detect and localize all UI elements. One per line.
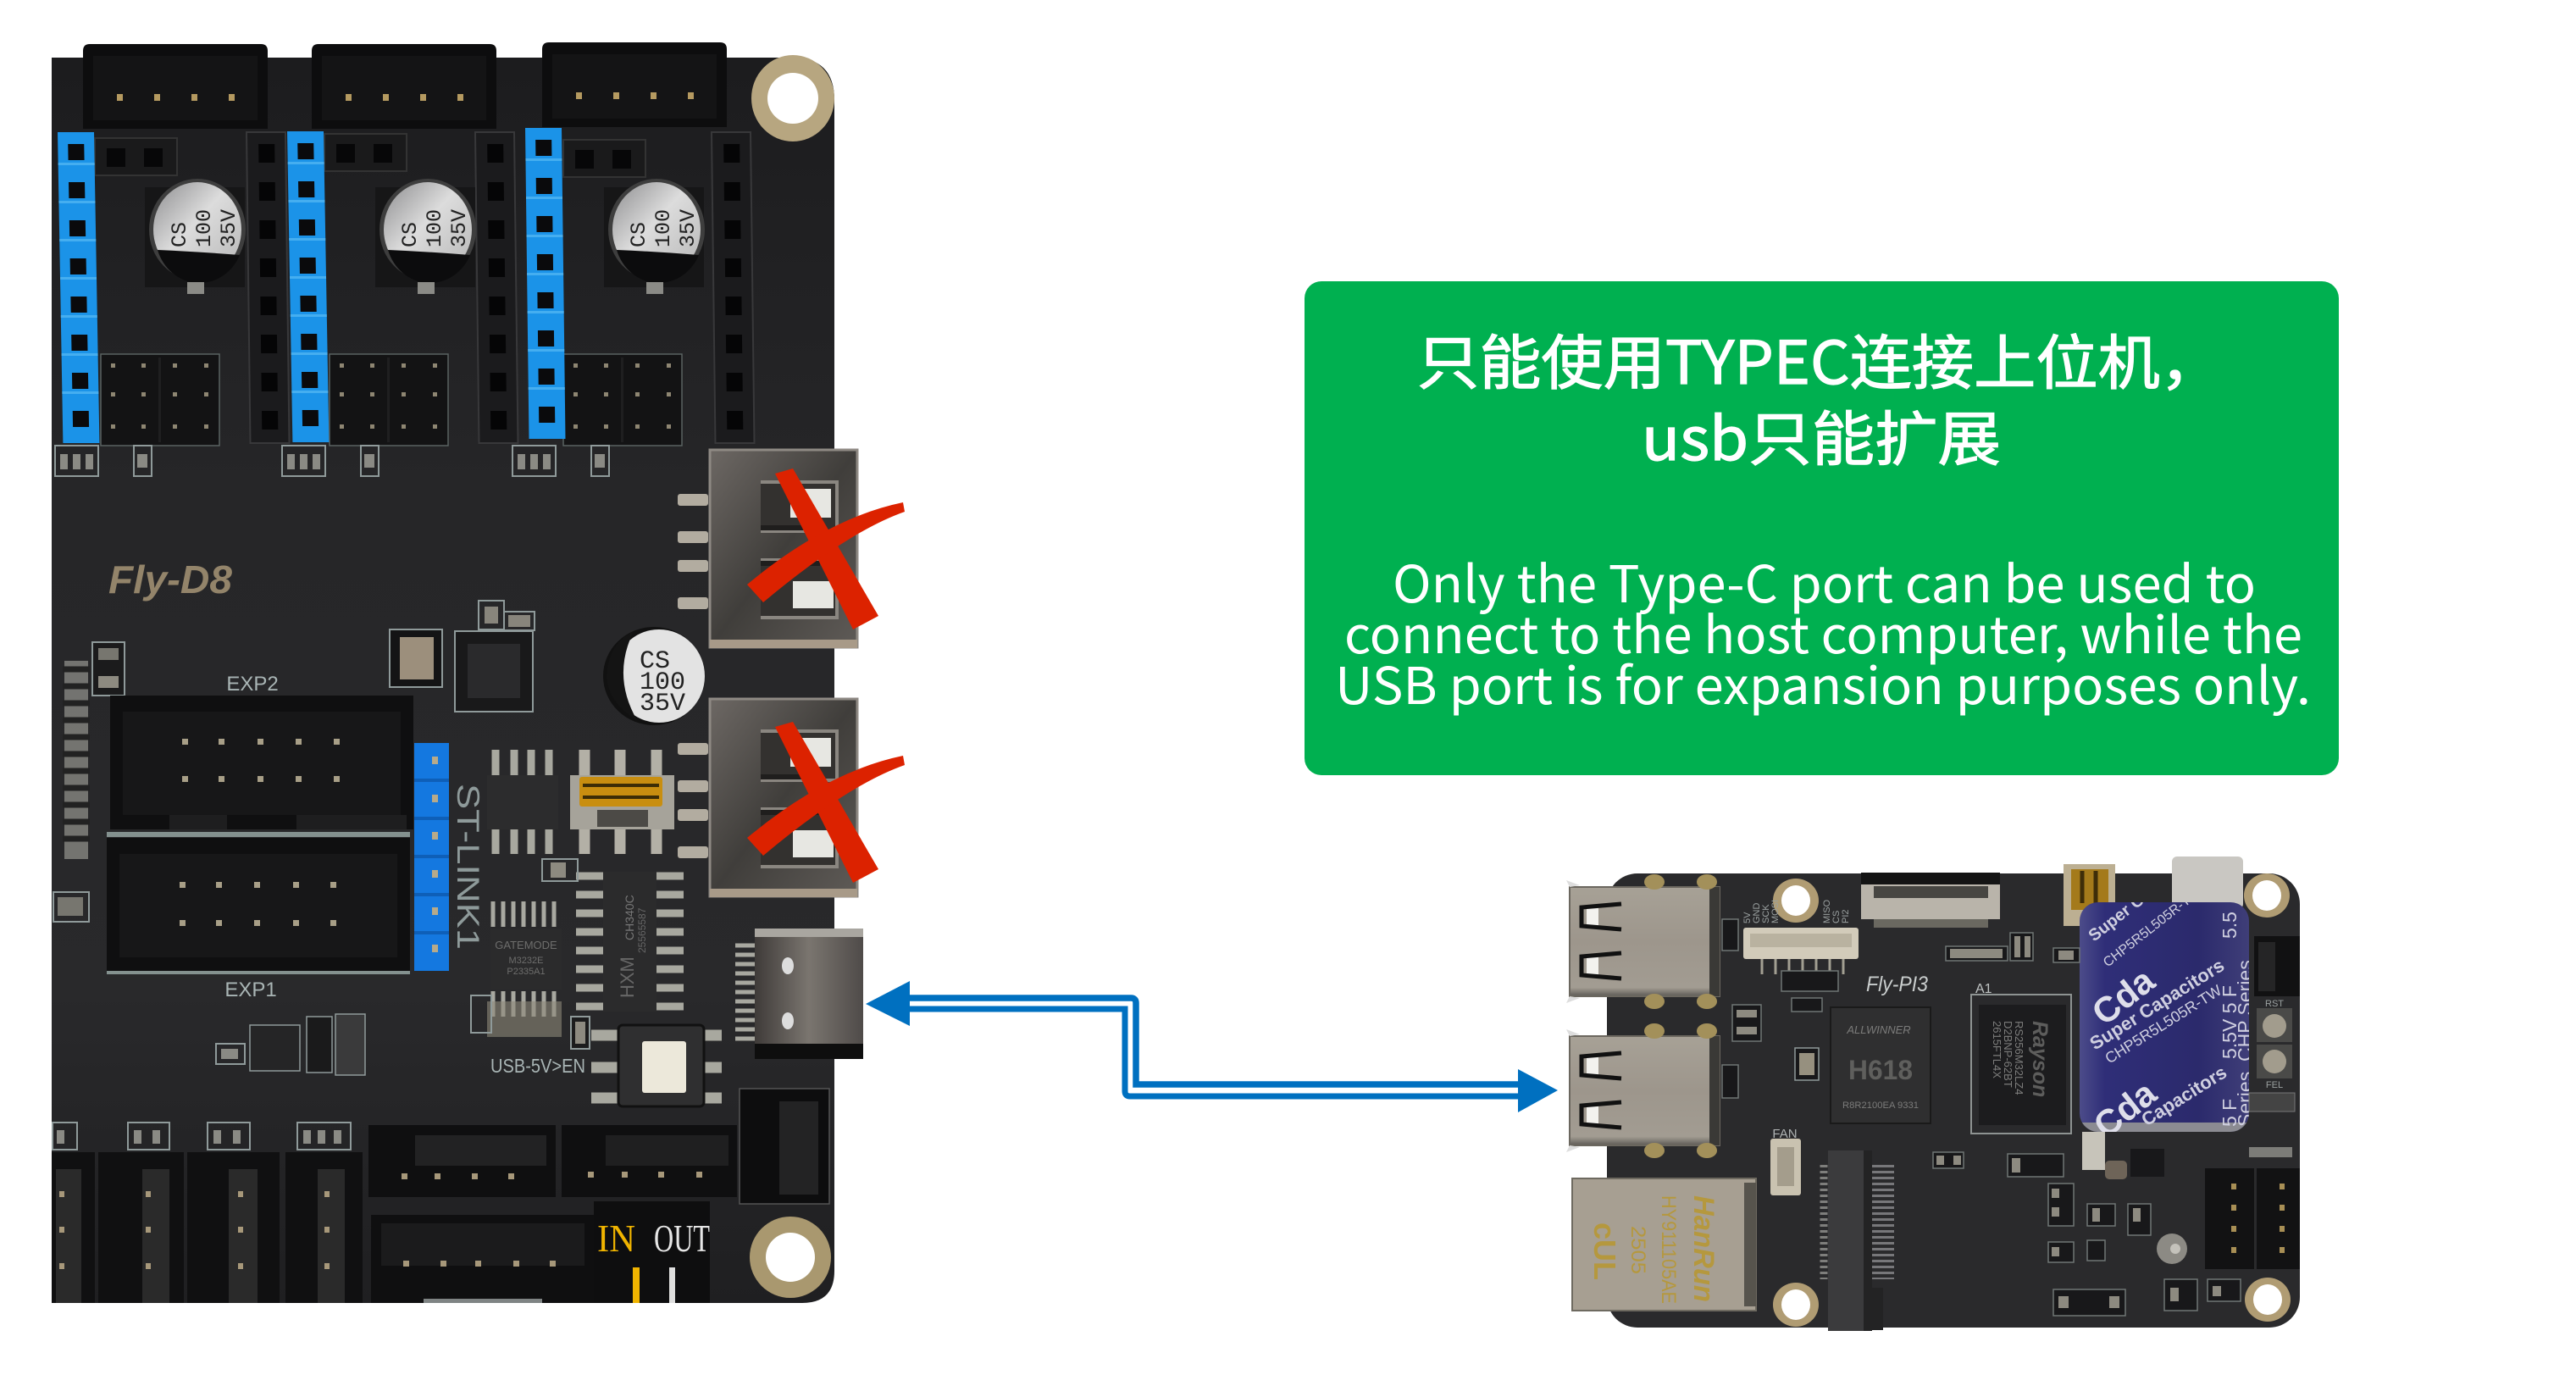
small component groups	[1722, 919, 2241, 1316]
crystal and QFN chips	[390, 601, 535, 712]
CH340 chip	[576, 872, 684, 1012]
capacitor labels: CS	[398, 222, 423, 247]
blue headers	[58, 128, 565, 443]
H618 SoC: H618	[1848, 1055, 1913, 1085]
EXP2 label: EXP2	[226, 673, 279, 696]
horizontal connectors bottom	[368, 1089, 829, 1303]
RAM chip: 2615FTL4X	[1991, 1021, 2003, 1078]
board name: Fly-D8	[108, 557, 232, 602]
callout: green note	[1305, 281, 2339, 775]
super capacitor: Cda	[2085, 960, 2163, 1033]
capacitor near USB	[603, 627, 705, 725]
USB host port 2	[1566, 1023, 1720, 1158]
pin labels: CS	[1831, 911, 1842, 923]
crystal	[1795, 1048, 1819, 1080]
2x4 pin headers	[2205, 1168, 2300, 1269]
fan connectors top	[83, 42, 727, 129]
red cross 1	[747, 468, 905, 629]
capacitors	[145, 179, 705, 294]
reset and FEL buttons: FEL	[2266, 1080, 2283, 1090]
super capacitor: 5 F	[2219, 1099, 2241, 1127]
A1 marker: A1	[1975, 982, 1992, 996]
stepper socket two-pin headers	[95, 134, 645, 177]
small SOIC chip group	[216, 1014, 365, 1075]
capacitor labels: 35V	[447, 209, 472, 247]
pin labels: PI2	[1841, 909, 1851, 923]
EXP1 connector	[107, 832, 410, 974]
top right two-pin connector	[2254, 936, 2300, 996]
super capacitor: 5.5V 5 F	[2219, 985, 2241, 1059]
USB type-A port 2	[678, 699, 857, 897]
pcb body	[52, 58, 834, 1303]
SOT chip	[487, 750, 558, 854]
pin labels	[1742, 899, 1851, 923]
pin labels: 5V	[1742, 912, 1753, 923]
RAM chip	[1971, 995, 2071, 1134]
OUT wire	[669, 1267, 675, 1303]
pin labels: MISO	[1822, 899, 1832, 923]
body text line 1: Only the Type-C port can be used to	[1393, 544, 2256, 618]
body text line 2: connect to the host computer, while the	[1344, 595, 2302, 668]
board: Fly-D8 mainboard	[52, 42, 905, 1303]
jumper headers	[101, 354, 682, 446]
mini HDMI port	[2064, 864, 2115, 926]
super capacitor: Capacitors	[2137, 1062, 2230, 1130]
CH340 chip: HXM	[617, 956, 638, 998]
M.2 slot	[1824, 1150, 1883, 1331]
heading: Chinese line 2: usb只能扩展	[1642, 392, 2001, 478]
FPC connector	[1861, 873, 2000, 928]
capacitor labels: CS	[168, 222, 192, 247]
ST-LINK blue header	[414, 743, 449, 971]
Fly-PI3 label: Fly-PI3	[1866, 973, 1928, 996]
mounting hole top	[751, 55, 834, 141]
super capacitor: CHP Series	[2234, 960, 2256, 1062]
pin labels: GND	[1752, 903, 1762, 923]
super capacitor: Series	[2234, 1072, 2256, 1127]
EXP2 connector	[110, 696, 413, 829]
screw	[2157, 1234, 2187, 1264]
GATEMODE chip: M3232E	[509, 956, 543, 966]
RJ45 port: HanRun	[1687, 1195, 1720, 1302]
H618 SoC: ALLWINNER	[1846, 1023, 1911, 1036]
IN wire	[633, 1267, 640, 1303]
arrow: double line connecting type-C to host USB	[866, 981, 1558, 1112]
capacitor labels: 35V	[676, 209, 701, 247]
super capacitor: CHP5R5L505R-TW	[2101, 885, 2204, 970]
USB-5V>EN label: USB-5V>EN	[490, 1055, 585, 1077]
stepper socket black headers	[247, 132, 754, 443]
board: Fly-PI3 host computer	[1566, 845, 2300, 1331]
RAM chip: D2BNP-62BT	[2002, 1021, 2014, 1088]
super capacitor: Super Capacitors	[2086, 955, 2228, 1054]
capacitor near USB: CS	[640, 647, 670, 676]
RAM chip: Rayson	[2028, 1021, 2052, 1097]
super capacitor: CHP5R5L505R-TW	[2102, 982, 2224, 1067]
capacitor labels: 100	[192, 209, 217, 247]
slide switch	[570, 750, 674, 854]
EXP1 label: EXP1	[224, 979, 277, 1001]
small parts group	[471, 859, 590, 1049]
white pin connector	[1743, 928, 1859, 974]
RJ45 port: cUL	[1587, 1222, 1622, 1280]
H618 SoC	[1831, 1007, 1931, 1123]
pin labels: MOSI	[1770, 900, 1781, 923]
capacitor labels	[168, 209, 701, 247]
fine pitch parts right	[2249, 1093, 2295, 1157]
USB-C power port	[2172, 857, 2243, 909]
USB type-A port 1	[678, 450, 857, 648]
body text line 3: USB port is for expansion purposes only.	[1335, 646, 2311, 719]
FAN connector: FAN	[1772, 1127, 1798, 1141]
OUT label: OUT	[654, 1217, 710, 1260]
H618 SoC: R8R2100EA 9331	[1842, 1100, 1919, 1111]
red cross 2	[747, 722, 905, 883]
capacitor labels: 100	[423, 209, 447, 247]
IN label: IN	[597, 1217, 635, 1260]
capacitor near USB: 100	[640, 668, 685, 697]
FAN connector	[1770, 1127, 1801, 1195]
super capacitor: Cda	[2086, 1073, 2164, 1145]
RAM chip: RS256M32LZ4	[2013, 1021, 2025, 1095]
vertical connectors bottom	[52, 1152, 363, 1303]
capacitor near USB: 35V	[640, 690, 685, 718]
pcb body	[1607, 873, 2300, 1328]
super capacitor	[2080, 902, 2249, 1132]
CH340 chip: CH340C	[623, 895, 636, 940]
USB type-C port	[735, 929, 863, 1059]
CH340 chip: 25565587	[636, 907, 648, 953]
left edge parts	[53, 642, 125, 922]
reset and FEL buttons: RST	[2265, 999, 2284, 1009]
GATEMODE chip	[490, 901, 562, 1017]
mounting holes	[1773, 873, 2291, 1327]
reset and FEL buttons	[2257, 999, 2292, 1090]
super capacitor: 5.5	[2219, 912, 2241, 939]
silkscreen component groups	[55, 446, 609, 476]
RJ45 port: 2505	[1626, 1226, 1649, 1274]
push button	[591, 1025, 722, 1106]
GATEMODE chip: GATEMODE	[495, 939, 557, 951]
ST-LINK1 label: ST-LINK1	[451, 784, 485, 950]
capacitor labels: 35V	[217, 209, 241, 247]
capacitor labels: 100	[651, 209, 676, 247]
heading: Chinese line 1: 只能使用TYPEC连接上位机，	[1417, 316, 2222, 402]
GATEMODE chip: P2335A1	[507, 967, 546, 977]
mounting hole bottom	[750, 1217, 831, 1298]
RJ45 port: HY911105AE	[1657, 1195, 1680, 1304]
bottom silk groups	[53, 1123, 351, 1150]
capacitor labels: CS	[627, 222, 651, 247]
super capacitor: Super Capacitors	[2086, 845, 2208, 945]
USB host port 1	[1566, 874, 1720, 1009]
RJ45 port	[1572, 1178, 1756, 1311]
pin labels: SCK	[1761, 904, 1771, 923]
